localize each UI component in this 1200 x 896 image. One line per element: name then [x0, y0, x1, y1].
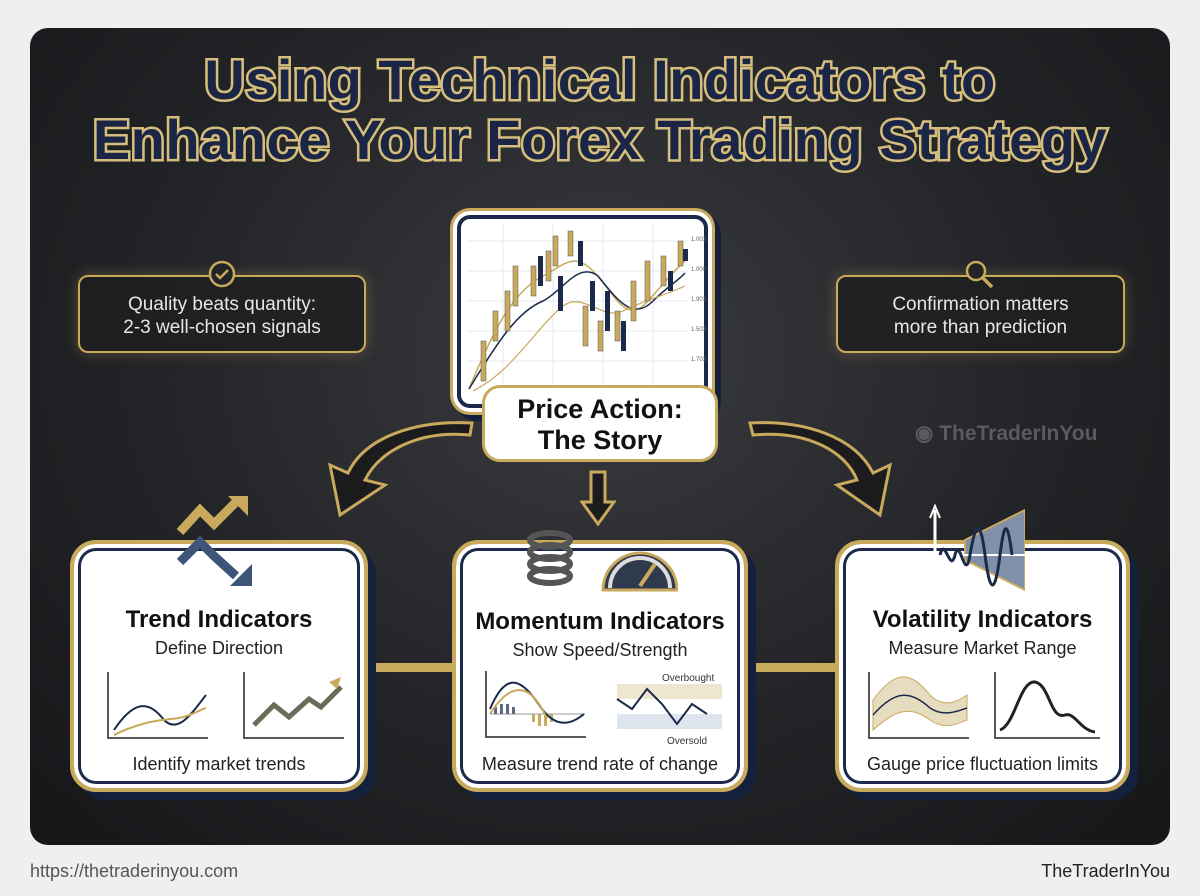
title [93, 48, 1110, 173]
card: momentum: Measure trend rate of change [482, 754, 718, 774]
icon: magnifier [966, 260, 994, 288]
icon: spring and gauge [527, 530, 678, 592]
card: trend indicators: Identify market trends [132, 754, 306, 774]
card: volatility: Gauge price fluctuation limits [867, 754, 1098, 774]
card: volatility [835, 540, 1130, 792]
connectors [368, 663, 452, 672]
arrow: to momentum [580, 470, 616, 526]
callout: confirmation matters [836, 275, 1125, 353]
mini chart: momentum [485, 671, 722, 747]
card: momentum [452, 540, 748, 792]
mini chart: momentum: Oversold [667, 736, 707, 747]
chart: price action: 1.003 [691, 237, 707, 243]
icon: volatility wave [929, 504, 1025, 592]
callout: quality beats quantity: 2-3 well-chosen signals [123, 317, 321, 338]
card: volatility: Measure Market Range [888, 638, 1077, 658]
card: trend indicators [70, 540, 368, 792]
watermark: ◉ TheTraderInYou [915, 422, 1097, 445]
footer: brand: TheTraderInYou [1041, 861, 1170, 881]
arrow: to volatility [748, 421, 892, 518]
card: trend indicators: Define Direction [155, 638, 283, 658]
title: Enhance Your Forex Trading Strategy [93, 108, 1107, 171]
mini chart: momentum: Overbought [662, 673, 714, 684]
label: price action the story [482, 385, 718, 462]
mini chart: trend [107, 672, 344, 739]
icon: trend arrows [176, 496, 252, 586]
footer: url: https://thetraderinyou.com [30, 861, 238, 881]
callout: confirmation matters: more than prediction [894, 317, 1067, 338]
label: price action the story: Price Action: [517, 394, 683, 424]
title: Using Technical Indicators to [204, 48, 996, 111]
callout: confirmation matters: Confirmation matters [892, 294, 1069, 315]
mini chart: volatility [868, 672, 1100, 739]
card: momentum: Momentum Indicators [475, 608, 725, 635]
chart: price action: 1.903 [691, 297, 707, 303]
callout: quality beats quantity [78, 275, 366, 353]
card: momentum: Show Speed/Strength [512, 640, 688, 660]
label: price action the story: The Story [538, 425, 662, 455]
chart: price action: 1.000 [691, 267, 707, 273]
callout: quality beats quantity: Quality beats quantity: [128, 294, 316, 315]
arrow: to trend [328, 421, 474, 518]
card: trend indicators: Trend Indicators [126, 606, 312, 633]
chart: price action: 1.703 [691, 357, 707, 363]
card: volatility: Volatility Indicators [873, 606, 1092, 633]
chart: price action: 1.503 [691, 327, 707, 333]
icon: check [208, 260, 236, 288]
chart: price action [450, 208, 715, 415]
